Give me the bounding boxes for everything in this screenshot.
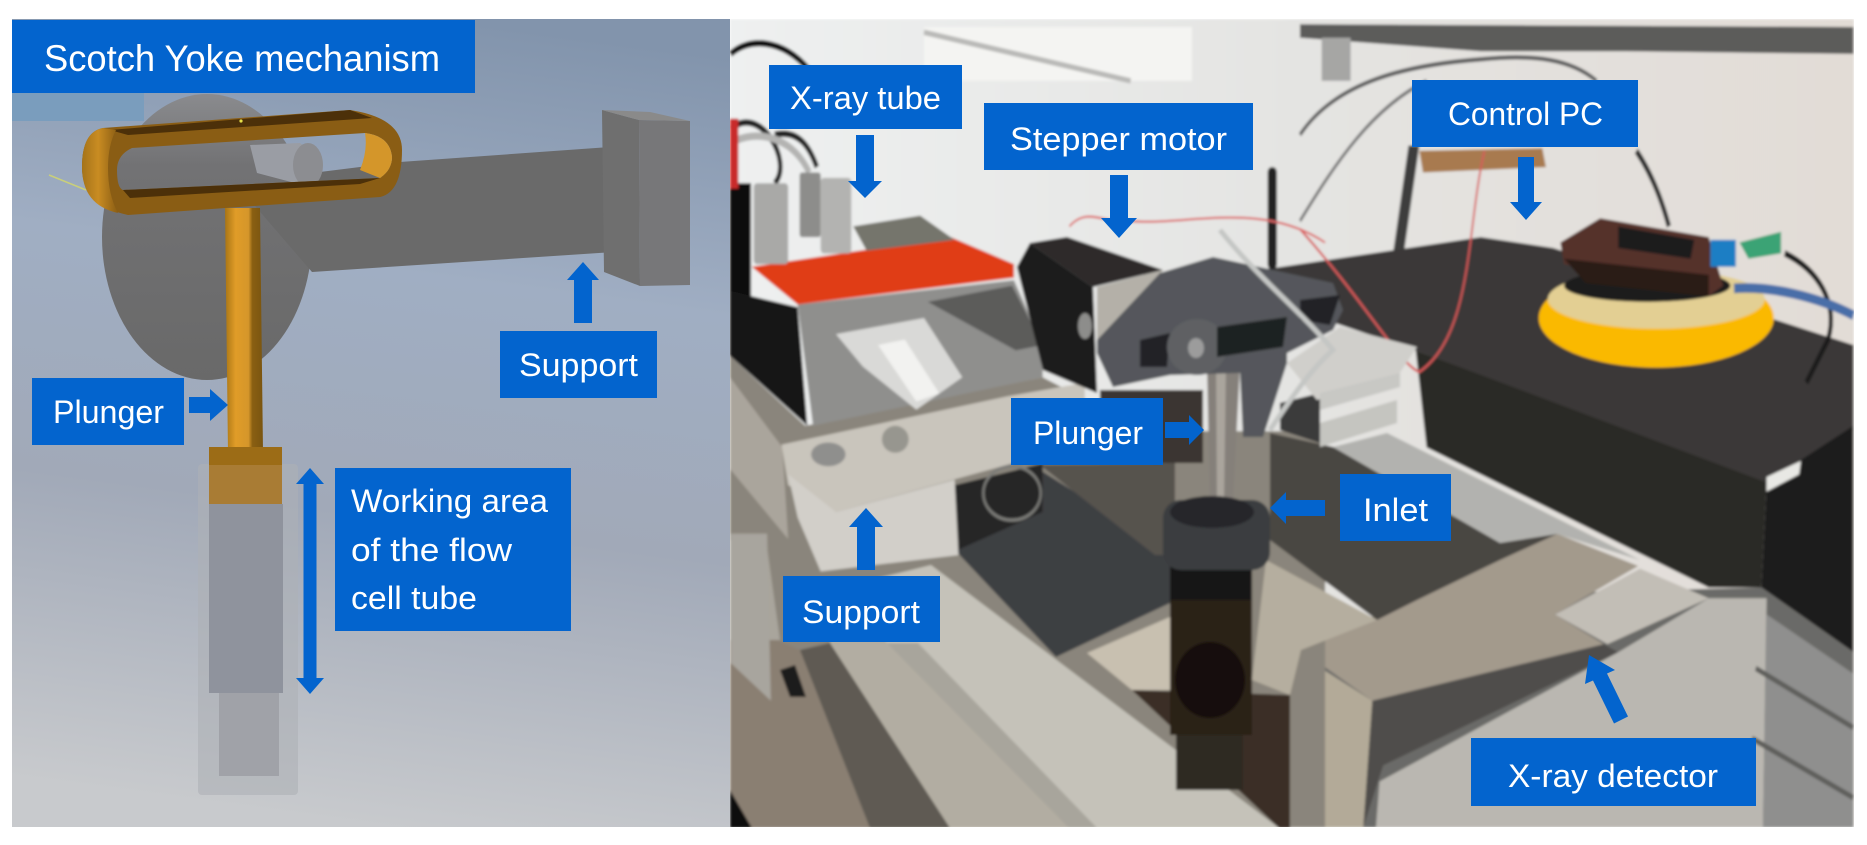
label: Support (photo): Support [802, 594, 920, 630]
label: Working area of the flow cell tube: cell tube [351, 580, 477, 616]
label: Scotch Yoke mechanism title: Scotch Yoke mechanism [44, 38, 440, 79]
label: X-ray tube: X-ray tube [790, 80, 941, 116]
arrow: to CAD support [567, 262, 599, 323]
label: Plunger (CAD) [32, 378, 184, 445]
photo: control PC, tape, board and detector [1264, 24, 1853, 827]
CAD: flow cell tube [198, 504, 298, 795]
label: Working area of the flow cell tube: of the flow [351, 532, 513, 568]
CAD: crank pin [250, 143, 323, 182]
label: Support (CAD) [500, 331, 657, 398]
label: Inlet: Inlet [1363, 492, 1428, 528]
label: X-ray detector [1471, 738, 1756, 806]
CAD: yoke frame [82, 110, 402, 215]
arrow: to X-ray detector [1585, 655, 1628, 724]
label: Plunger (CAD): Plunger [53, 394, 164, 430]
arrow: to photo plunger [1165, 415, 1204, 445]
photo: stepper motor [1017, 237, 1203, 463]
label: Support (photo) [783, 576, 940, 642]
label: Plunger (photo) [1011, 398, 1163, 465]
CAD: support end block [602, 110, 690, 286]
arrow: to inlet [1270, 492, 1325, 524]
CAD: plunger rod [225, 208, 263, 452]
photo: rails, dark plate and right support block [730, 327, 1640, 828]
label: Stepper motor [984, 103, 1253, 170]
photo: flow cell tube and collar [1163, 496, 1270, 790]
photo: printed Scotch yoke [1097, 230, 1343, 437]
label: X-ray tube [769, 65, 962, 129]
label: Plunger (photo): Plunger [1033, 415, 1143, 451]
CAD: support arm [296, 148, 604, 272]
CAD: plunger collar [209, 447, 282, 504]
label: Inlet [1340, 474, 1451, 541]
photo: front support plate [731, 383, 1085, 701]
CAD: support disc [102, 94, 312, 380]
arrow: to control PC [1510, 157, 1542, 220]
photo: plunger rod [1207, 365, 1240, 500]
arrow: to X-ray tube [848, 135, 882, 198]
label: Stepper motor: Stepper motor [1010, 121, 1227, 157]
arrow: to photo support [849, 508, 883, 570]
label: X-ray detector: X-ray detector [1508, 758, 1718, 794]
arrow: to stepper motor [1101, 175, 1137, 238]
photo: X-ray tube assembly [730, 27, 1325, 827]
panel: laboratory photo of the setup [730, 19, 1854, 828]
label: Control PC: Control PC [1448, 96, 1603, 132]
arrow: working area span [296, 468, 324, 694]
label: Control PC [1412, 80, 1638, 147]
arrow: to CAD plunger [189, 389, 228, 421]
label: Working area of the flow cell tube: Working area [351, 483, 548, 519]
label: Working area of the flow cell tube [335, 468, 571, 631]
label: Support (CAD): Support [519, 347, 638, 383]
label: Scotch Yoke mechanism title [12, 20, 475, 93]
panel: Scotch Yoke CAD model [12, 19, 730, 827]
